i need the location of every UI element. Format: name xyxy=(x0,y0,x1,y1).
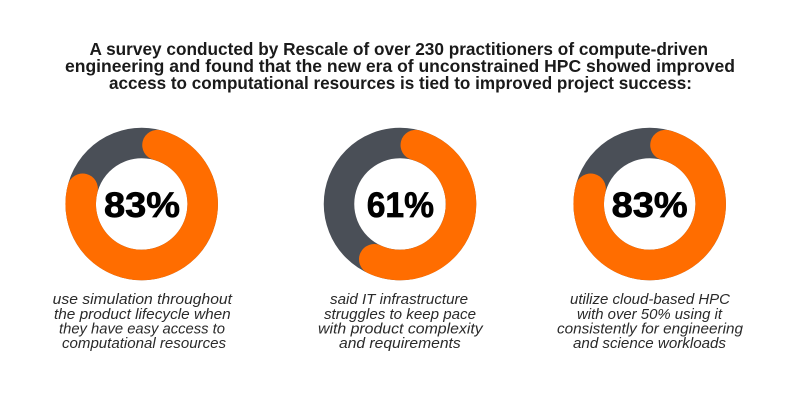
title xyxy=(65,39,735,93)
caption: IT infrastructure xyxy=(318,292,484,352)
value: 83%: 83% xyxy=(104,186,180,225)
caption: IT infrastructure: said IT infrastructure xyxy=(330,292,468,308)
caption: IT infrastructure: and requirements xyxy=(339,336,461,352)
caption: cloud-based HPC: consistently for engineering xyxy=(557,322,743,338)
title: A survey conducted by Rescale of over 230 practitioners of compute-driven xyxy=(90,39,708,59)
caption: IT infrastructure: struggles to keep pace xyxy=(324,307,476,323)
donut chart: 61% xyxy=(339,143,461,265)
title: access to computational resources is tied to improved project success: xyxy=(109,73,692,93)
caption: simulation: they have easy access to xyxy=(59,322,225,338)
value: 61%: 61% xyxy=(367,186,434,225)
caption: simulation: use simulation throughout xyxy=(53,292,233,308)
caption: cloud-based HPC: with over 50% using it xyxy=(577,307,723,323)
title: engineering and found that the new era of unconstrained HPC showed improved xyxy=(65,56,735,76)
caption: simulation: computational resources xyxy=(62,336,226,352)
caption: cloud-based HPC: utilize cloud-based HPC xyxy=(570,292,731,308)
donut chart: 83% xyxy=(81,143,203,265)
donut chart: 83% xyxy=(589,143,711,265)
panel: 61% IT infrastructure xyxy=(318,143,484,352)
caption: cloud-based HPC: and science workloads xyxy=(573,336,726,352)
caption: cloud-based HPC xyxy=(557,292,743,352)
panel: 83% simulation xyxy=(53,143,233,352)
caption: IT infrastructure: with product complexity xyxy=(318,322,484,338)
caption: simulation: the product lifecycle when xyxy=(54,307,231,323)
value: 83%: 83% xyxy=(612,186,688,225)
caption: simulation xyxy=(53,292,233,352)
panel: 83% cloud-based HPC xyxy=(557,143,743,352)
